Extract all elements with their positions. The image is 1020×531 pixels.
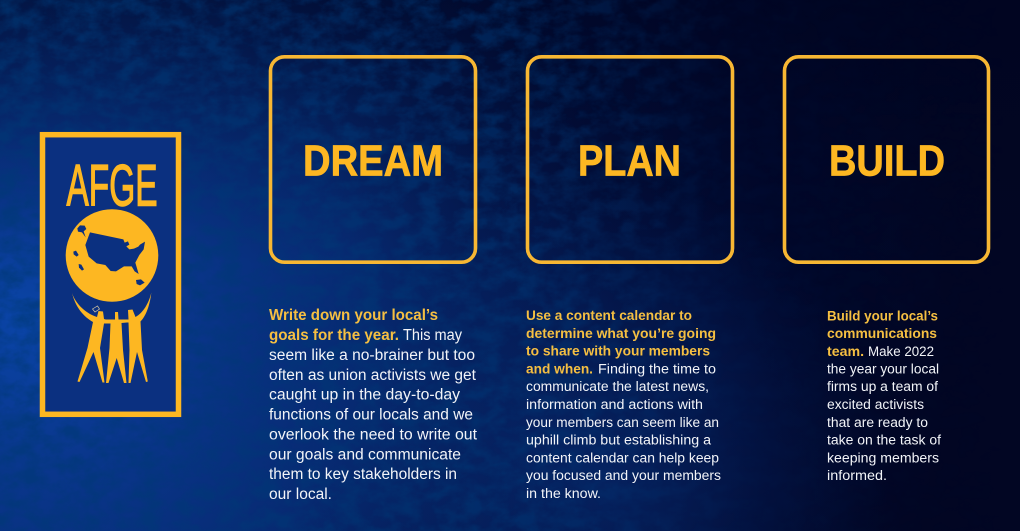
text block: PLAN description: uphill climb but establishing a	[526, 432, 711, 448]
text block: PLAN description: your members can seem like an	[526, 415, 719, 431]
text block: DREAM description: our local.	[269, 486, 332, 503]
text block: DREAM description: overlook the need to write out	[269, 426, 478, 444]
text block: PLAN description: Use a content calendar to	[526, 308, 692, 324]
text block: PLAN description: determine what you’re going	[526, 326, 716, 342]
text block: PLAN description: Finding the time to	[598, 362, 716, 378]
text block: BUILD description: team.	[827, 344, 864, 360]
text block: PLAN description: in the know.	[526, 486, 601, 502]
text block: PLAN description: information and actions with	[526, 397, 703, 413]
text block: BUILD description	[827, 308, 941, 484]
text block: DREAM description: caught up in the day-to-day	[269, 386, 460, 404]
heading: BUILD: BUILD	[829, 138, 945, 186]
text block: BUILD description: excited activists	[827, 397, 924, 413]
text block: DREAM description: them to key stakeholders in	[269, 466, 457, 483]
text block: DREAM description: Write down your local’s	[269, 307, 438, 324]
logo wordmark: AFGE	[66, 154, 158, 218]
panel: BUILD	[784, 57, 988, 262]
text block: DREAM description: seem like a no-brainer but too	[269, 347, 475, 364]
heading: DREAM: DREAM	[303, 138, 443, 186]
text block: DREAM description: functions of our locals and we	[269, 406, 473, 424]
text block: BUILD description: firms up a team of	[827, 379, 938, 395]
logo: AFGE	[42, 135, 178, 414]
text block: PLAN description: to share with your members	[526, 344, 710, 360]
text block: BUILD description: keeping members	[827, 450, 939, 466]
text block: PLAN description: and when.	[526, 362, 593, 378]
text block: PLAN description: communicate the latest news,	[526, 379, 709, 395]
text block: BUILD description: Build your local’s	[827, 308, 938, 324]
heading: PLAN: PLAN	[578, 138, 681, 186]
text block: DREAM description: goals for the year.	[269, 327, 399, 344]
text block: BUILD description: that are ready to	[827, 415, 928, 431]
text block: PLAN description	[526, 308, 721, 502]
text block: DREAM description: our goals and communicate	[269, 446, 461, 464]
logo globe with map of the United States	[66, 209, 158, 302]
text block: DREAM description	[269, 307, 478, 503]
text block: BUILD description: Make 2022	[868, 344, 934, 360]
text block: DREAM description: This may	[403, 327, 462, 344]
text block: BUILD description: informed.	[827, 468, 887, 484]
panel: DREAM	[270, 57, 476, 262]
text block: BUILD description: the year your local	[827, 362, 939, 378]
text block: DREAM description: often as union activists we get	[269, 367, 477, 384]
text block: PLAN description: content calendar can help keep	[526, 450, 719, 466]
text block: BUILD description: take on the task of	[827, 432, 941, 448]
panel: PLAN	[528, 57, 732, 262]
text block: PLAN description: you focused and your members	[526, 468, 721, 484]
logo figures holding up the globe	[72, 292, 151, 383]
text block: BUILD description: communications	[827, 326, 937, 342]
